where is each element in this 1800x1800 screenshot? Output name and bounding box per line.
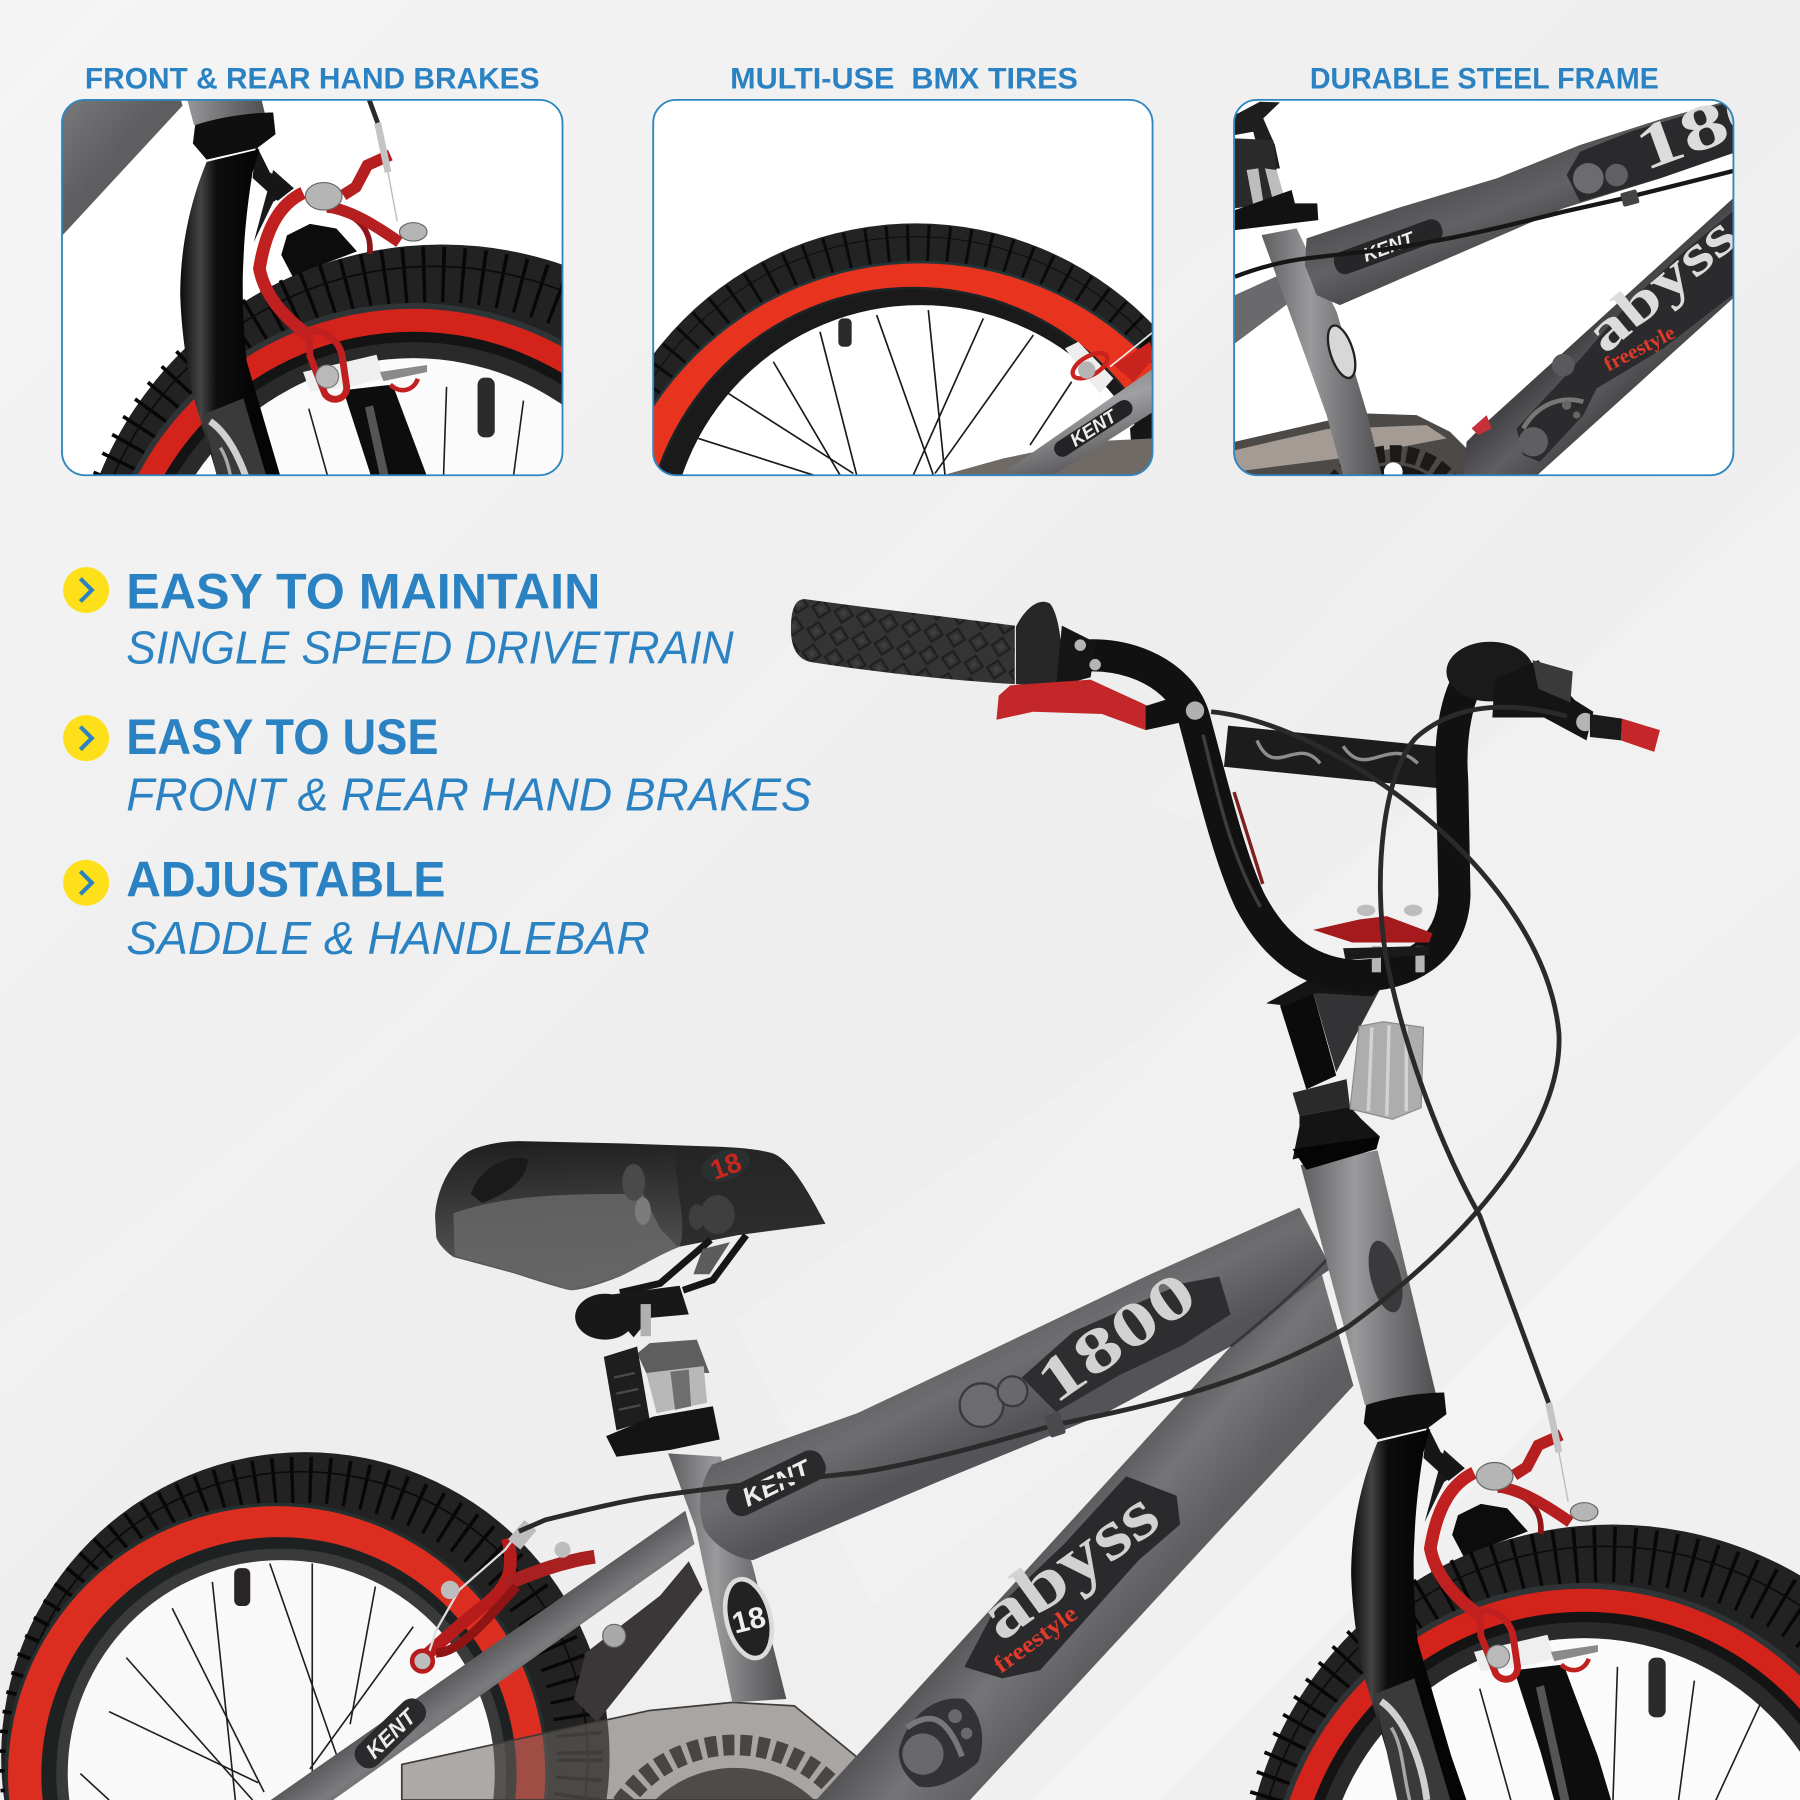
badge: KENT on seat stay (349, 1693, 431, 1774)
reflector (1350, 1022, 1423, 1119)
panel: durable steel frame (1233, 68, 1734, 476)
panel: multi-use BMX tires (652, 68, 1154, 476)
brake cables (519, 707, 1567, 1531)
badge: KENT on seat stay: KENT (361, 1703, 422, 1763)
icon: yellow chevron bullet (63, 860, 109, 906)
bolt (603, 1624, 626, 1647)
seat post and clamp (575, 1235, 746, 1457)
decal: abyss freestyle: freestyle (989, 1601, 1083, 1679)
rear wheel (1, 1452, 610, 1800)
decal: top tube 1800 (960, 1259, 1231, 1427)
panel photo: tire close-up (654, 101, 1152, 474)
icon: yellow chevron bullet (63, 715, 109, 761)
right grip and lever (1446, 642, 1660, 752)
fork far blade (1514, 1665, 1619, 1800)
badge: seat tube logo: 18 (729, 1601, 769, 1641)
illustration: BMX bike (1, 599, 1800, 1800)
front wheel (1243, 1524, 1800, 1800)
badge: KENT on top tube (722, 1446, 831, 1521)
decal: paisley (899, 1698, 982, 1787)
panel photo: frame close-up: 1800 (1626, 55, 1800, 184)
top tube (700, 1208, 1332, 1560)
badge: KENT on top tube: KENT (737, 1453, 817, 1513)
front brake (1430, 1403, 1598, 1679)
front fork rear arch (1423, 1425, 1528, 1559)
subheading: single speed drivetrain: SINGLE SPEED DRIVETRAIN (126, 622, 734, 674)
feature: easy to use (63, 708, 812, 820)
panel photo: frame close-up (1234, 101, 1732, 474)
heading: easy to maintain: EASY TO MAINTAIN (126, 562, 600, 619)
feature: adjustable (63, 851, 650, 964)
saddle: 18 (706, 1146, 745, 1186)
panel frame: frame (1234, 100, 1733, 475)
panel heading: frame: DURABLE STEEL FRAME (1310, 62, 1659, 95)
heading: adjustable: ADJUSTABLE (126, 851, 445, 908)
down tube (816, 1268, 1353, 1800)
subheading: saddle and handlebar: SADDLE & HANDLEBAR (126, 912, 650, 964)
cable stop (1044, 1411, 1066, 1438)
head tube (1301, 1150, 1436, 1405)
panel frame: tires (653, 100, 1153, 475)
panel photo: tire close-up: KENT (1066, 404, 1121, 451)
panel photo: frame close-up: freestyle (1601, 322, 1679, 376)
tube seam (1231, 1257, 1329, 1347)
rear dropout strut (574, 1561, 703, 1722)
seat stay (218, 1511, 695, 1800)
panel: front and rear hand brakes (61, 68, 564, 476)
seat tube (668, 1453, 786, 1702)
fork near blade (1351, 1429, 1475, 1800)
heading: easy to use: EASY TO USE (126, 708, 439, 765)
panel heading: brakes: FRONT & REAR HAND BRAKES (85, 62, 540, 95)
panel photo: frame close-up: KENT (1360, 228, 1419, 267)
panel photo: brake close-up (62, 100, 562, 474)
handlebar (1073, 655, 1475, 976)
feature list (63, 562, 812, 964)
icon: yellow chevron bullet (63, 567, 109, 613)
panel frame: brakes (62, 100, 562, 475)
left brake lever (996, 680, 1204, 730)
chain ring (597, 1745, 872, 1800)
panel heading: tires: MULTI-USE BMX TIRES (730, 62, 1078, 95)
decal: abyss freestyle (964, 1474, 1180, 1679)
chain guard (402, 1702, 886, 1800)
left grip (791, 599, 1101, 686)
rear brake (412, 1520, 595, 1671)
stem clamp (1313, 905, 1433, 972)
subheading: front and rear hand brakes: FRONT & REAR HAND BRAKES (126, 768, 812, 820)
decal: head tube badge (1362, 1237, 1409, 1316)
saddle (435, 1141, 825, 1290)
feature: easy to maintain (63, 562, 734, 674)
panel photo: frame close-up: abyss (1573, 204, 1749, 365)
badge: seat tube logo (718, 1574, 779, 1663)
fork crown ring (1364, 1392, 1446, 1440)
decal: top tube 1800: 1800 (1024, 1259, 1209, 1417)
decal: abyss freestyle: abyss (965, 1474, 1173, 1656)
headset and steerer (1266, 979, 1383, 1170)
